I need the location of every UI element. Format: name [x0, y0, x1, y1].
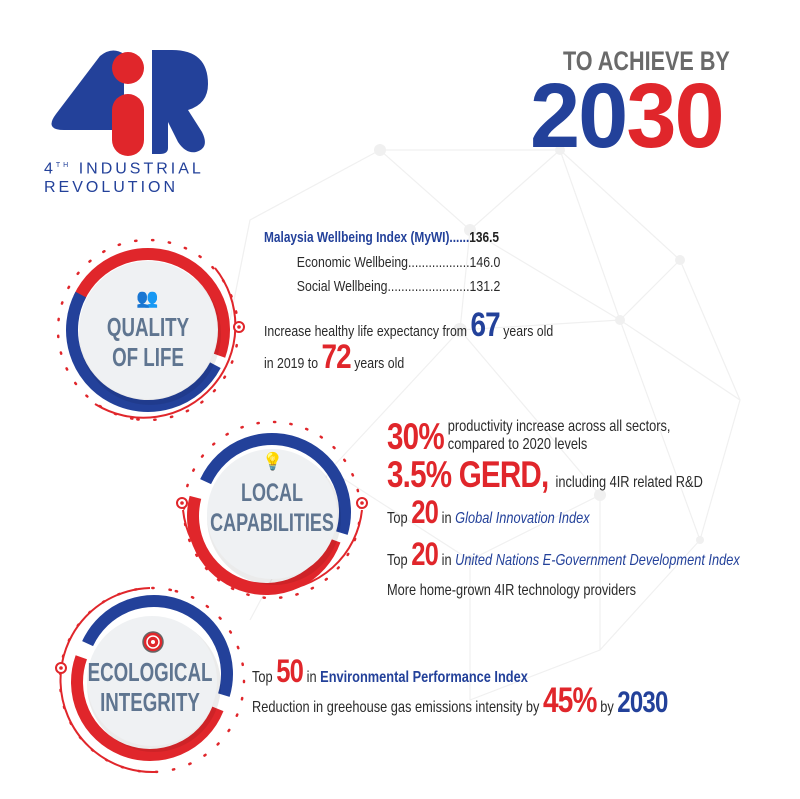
text: local capabilities: 3.5% GERD, including 4IR related R&D [387, 454, 703, 495]
circle: quality of life: QUALITY [107, 312, 189, 342]
text: ecological integrity [252, 653, 668, 720]
heading: to achieve by 2030: 2030 [530, 65, 723, 167]
text: quality of life: Social Wellbeing........................131.2 [297, 278, 500, 295]
icon: target [142, 631, 164, 653]
circle: ecological integrity: ECOLOGICAL [88, 657, 212, 687]
circle: ecological integrity [55, 586, 246, 774]
logo text [44, 160, 204, 196]
text: quality of life: Malaysia Wellbeing Index (MyWI)......136.5 [264, 230, 499, 246]
logo: 4IR [44, 50, 208, 196]
circle: ecological integrity: INTEGRITY [100, 687, 200, 717]
circle: local capabilities: LOCAL [241, 479, 303, 507]
text: quality of life: Increase healthy life expectancy from 67 years old [264, 306, 553, 344]
icon: lightbulb: 💡 [262, 452, 283, 471]
text: quality of life: Economic Wellbeing..................146.0 [297, 254, 500, 271]
text: local capabilities: Top 20 in United Nations E-Government Development Index [387, 536, 740, 572]
text: quality of life [264, 230, 553, 376]
logo text: 4TH INDUSTRIAL [44, 160, 204, 177]
text: local capabilities: 30% [387, 416, 444, 457]
text: local capabilities: More home-grown 4IR technology providers [387, 582, 636, 599]
text: local capabilities [387, 416, 740, 599]
circle: local capabilities: CAPABILITIES [210, 509, 334, 537]
circle: quality of life [56, 238, 245, 421]
circle: local capabilities [176, 420, 368, 599]
icon: people: 👥 [136, 288, 158, 308]
text: local capabilities: compared to 2020 levels [448, 436, 587, 453]
logo text: REVOLUTION [44, 179, 178, 196]
text: local capabilities: Top 20 in Global Innovation Index [387, 494, 590, 530]
text: ecological integrity: Reduction in greehouse gas emissions intensity by 45% by 2030 [252, 681, 668, 720]
text: local capabilities: productivity increase across all sectors, [448, 418, 670, 435]
heading: to achieve by 2030: TO ACHIEVE BY [563, 46, 730, 76]
circle: quality of life: OF LIFE [112, 342, 184, 372]
text: quality of life: in 2019 to 72 years old [264, 338, 404, 376]
text: ecological integrity: Top 50 in Environmental Performance Index [252, 653, 528, 689]
